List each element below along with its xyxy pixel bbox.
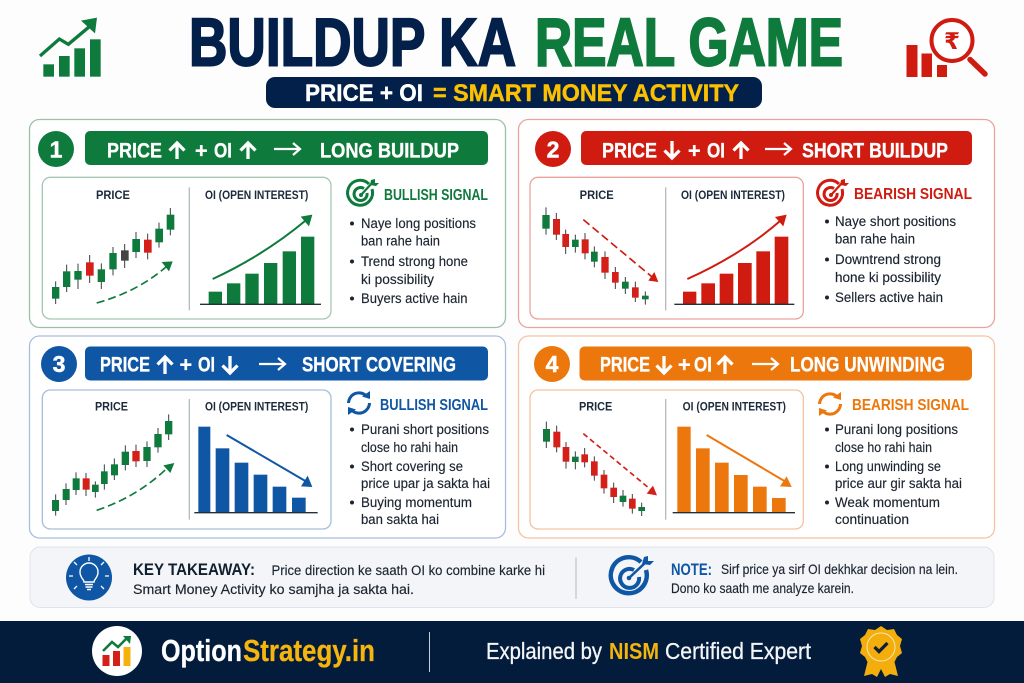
- dashed trend arrow: [583, 220, 658, 282]
- key takeaway text: Price direction ke saath OI ko combine karke hi: [272, 563, 545, 578]
- icon: rupee magnifier: ₹: [944, 29, 960, 55]
- heading: short buildup: [581, 131, 972, 165]
- bullet list: Trend strong hone: [361, 254, 468, 269]
- candlesticks rising: [52, 208, 174, 304]
- bullet list: [350, 216, 476, 306]
- icon: bearish target: [818, 179, 849, 205]
- bullet list: close ho rahi hain: [835, 440, 932, 455]
- takeaway strip: [30, 547, 994, 608]
- chart card: price rising, open interest falling: OI (OPEN INTEREST): [205, 399, 308, 413]
- signal label: BEARISH SIGNAL: [852, 397, 969, 414]
- key takeaway text: KEY TAKEAWAY:: [133, 561, 255, 579]
- icon: bullish target: [348, 179, 379, 205]
- heading: short buildup: SHORT BUILDUP: [802, 138, 948, 162]
- heading: long buildup: +: [195, 138, 208, 162]
- heading: long unwinding: +: [678, 352, 691, 376]
- heading: long buildup: LONG BUILDUP: [320, 138, 459, 162]
- heading: short covering: OI: [198, 352, 215, 376]
- chart card: price and open interest rising: OI (OPEN INTEREST): [205, 188, 308, 202]
- number badge 1: [38, 131, 74, 167]
- chart card: price falling, open interest falling: OI (OPEN INTEREST): [683, 399, 786, 413]
- chart card: price rising, open interest falling: [42, 390, 331, 529]
- key takeaway text: Smart Money Activity ko samjha ja sakta hai.: [133, 582, 414, 597]
- candlesticks falling: [543, 422, 645, 516]
- number badge 3: 3: [53, 351, 65, 377]
- icon: blue cycle: [348, 391, 370, 415]
- heading: long buildup: OI: [214, 138, 232, 162]
- panel: long unwinding: [518, 336, 994, 538]
- footer band: [0, 621, 1024, 683]
- chart card: price falling, open interest rising: PRICE: [580, 188, 614, 202]
- OI bars falling: [673, 427, 795, 513]
- bullet list: Weak momentum: [835, 495, 940, 510]
- bullet list: [825, 214, 956, 305]
- bullet list: Purani short positions: [361, 422, 489, 437]
- heading: short buildup: OI: [707, 138, 725, 162]
- heading: short buildup: +: [688, 138, 701, 162]
- panel: short covering: [30, 336, 506, 538]
- chart card: price falling, open interest falling: PRICE: [579, 399, 612, 413]
- heading: short covering: SHORT COVERING: [302, 352, 456, 376]
- credit line: [486, 638, 812, 664]
- title: [189, 4, 843, 80]
- bullet list: ban rahe hain: [361, 234, 440, 248]
- bullet list: Sellers active hain: [835, 290, 943, 305]
- chart card: price falling, open interest rising: OI (OPEN INTEREST): [681, 188, 785, 202]
- bullet list: price aur gir sakta hai: [835, 476, 962, 491]
- icon: certified medal: [860, 626, 902, 677]
- bullet list: Buying momentum: [361, 495, 472, 510]
- subtitle banner: PRICE + OI: [305, 80, 423, 107]
- panel: short buildup: [518, 120, 994, 328]
- bullet list: continuation: [835, 512, 909, 527]
- bullet list: Purani long positions: [835, 422, 958, 437]
- icon: blue target: [611, 556, 654, 593]
- subtitle banner: = SMART MONEY ACTIVITY: [433, 80, 739, 107]
- heading: long buildup: PRICE: [107, 138, 162, 162]
- bullet list: [350, 422, 490, 527]
- heading: long unwinding: [580, 346, 972, 380]
- subtitle banner: [266, 77, 762, 108]
- heading: long unwinding: LONG UNWINDING: [790, 352, 945, 376]
- heading: short covering: [85, 346, 488, 380]
- icon: growth chart: [40, 18, 101, 77]
- note text: Dono ko saath me analyze karein.: [671, 580, 854, 596]
- brand name: [161, 633, 375, 668]
- chart card: price falling, open interest falling: [530, 390, 803, 529]
- OI bars falling: [194, 427, 318, 513]
- heading: long unwinding: PRICE: [600, 352, 650, 376]
- title: BUILDUP KA: [189, 4, 516, 80]
- key takeaway text: [133, 561, 545, 597]
- note text: [671, 560, 958, 596]
- heading: short buildup: PRICE: [602, 138, 657, 162]
- bullet list: Buyers active hain: [361, 291, 468, 306]
- chart card: price falling, open interest rising: [530, 177, 803, 319]
- credit line: Certified Expert: [665, 638, 812, 664]
- dashed trend arrow: [97, 463, 174, 510]
- brand name: Strategy.in: [243, 633, 375, 668]
- dashed trend arrow: [583, 434, 657, 495]
- icon: orange cycle: [819, 392, 841, 416]
- bullet list: hone ki possibility: [835, 270, 941, 285]
- heading: short covering: PRICE: [100, 352, 150, 376]
- OI bars rising: [674, 215, 794, 304]
- bullet list: Naye short positions: [835, 214, 956, 229]
- bullet list: Naye long positions: [361, 216, 476, 231]
- note text: Sirf price ya sirf OI dekhkar decision na lein.: [721, 561, 958, 577]
- number badge 2: 2: [547, 136, 559, 162]
- bullet list: Long unwinding se: [835, 459, 941, 474]
- logo badge: [92, 626, 142, 676]
- signal label: BEARISH SIGNAL: [854, 186, 972, 203]
- title: REAL GAME: [535, 4, 843, 80]
- OI bars rising: [200, 215, 321, 304]
- candlesticks rising: [52, 414, 172, 516]
- bullet list: ban sakta hai: [361, 512, 439, 527]
- bullet list: ki possibility: [361, 272, 434, 287]
- number badge 2: [535, 131, 571, 167]
- brand name: Option: [161, 633, 242, 668]
- chart card: price and open interest rising: PRICE: [96, 188, 130, 202]
- credit line: NISM: [609, 638, 659, 664]
- bullet list: Short covering se: [361, 459, 463, 474]
- bullet list: [825, 422, 962, 527]
- number badge 3: [41, 346, 77, 382]
- credit line: Explained by: [486, 638, 602, 664]
- bullet list: ban rahe hain: [835, 232, 915, 246]
- icon: rupee magnifier: [906, 20, 985, 77]
- number badge 4: [534, 346, 570, 382]
- dashed trend arrow: [97, 261, 173, 303]
- heading: long unwinding: OI: [694, 352, 712, 376]
- signal label: BULLISH SIGNAL: [380, 397, 488, 414]
- number badge 1: 1: [50, 136, 63, 162]
- candlesticks falling: [542, 207, 649, 305]
- number badge 4: 4: [546, 351, 559, 377]
- signal label: BULLISH SIGNAL: [384, 187, 488, 204]
- bullet list: close ho rahi hain: [361, 440, 458, 455]
- note text: NOTE:: [671, 560, 712, 579]
- chart card: price and open interest rising: [42, 177, 331, 319]
- panel: long buildup: [30, 120, 506, 328]
- heading: short covering: +: [180, 352, 192, 376]
- bullet list: Downtrend strong: [835, 252, 941, 267]
- chart card: price rising, open interest falling: PRICE: [95, 399, 128, 413]
- bullet list: price upar ja sakta hai: [361, 476, 490, 491]
- heading: long buildup: [85, 131, 488, 165]
- icon: light bulb: [66, 554, 112, 600]
